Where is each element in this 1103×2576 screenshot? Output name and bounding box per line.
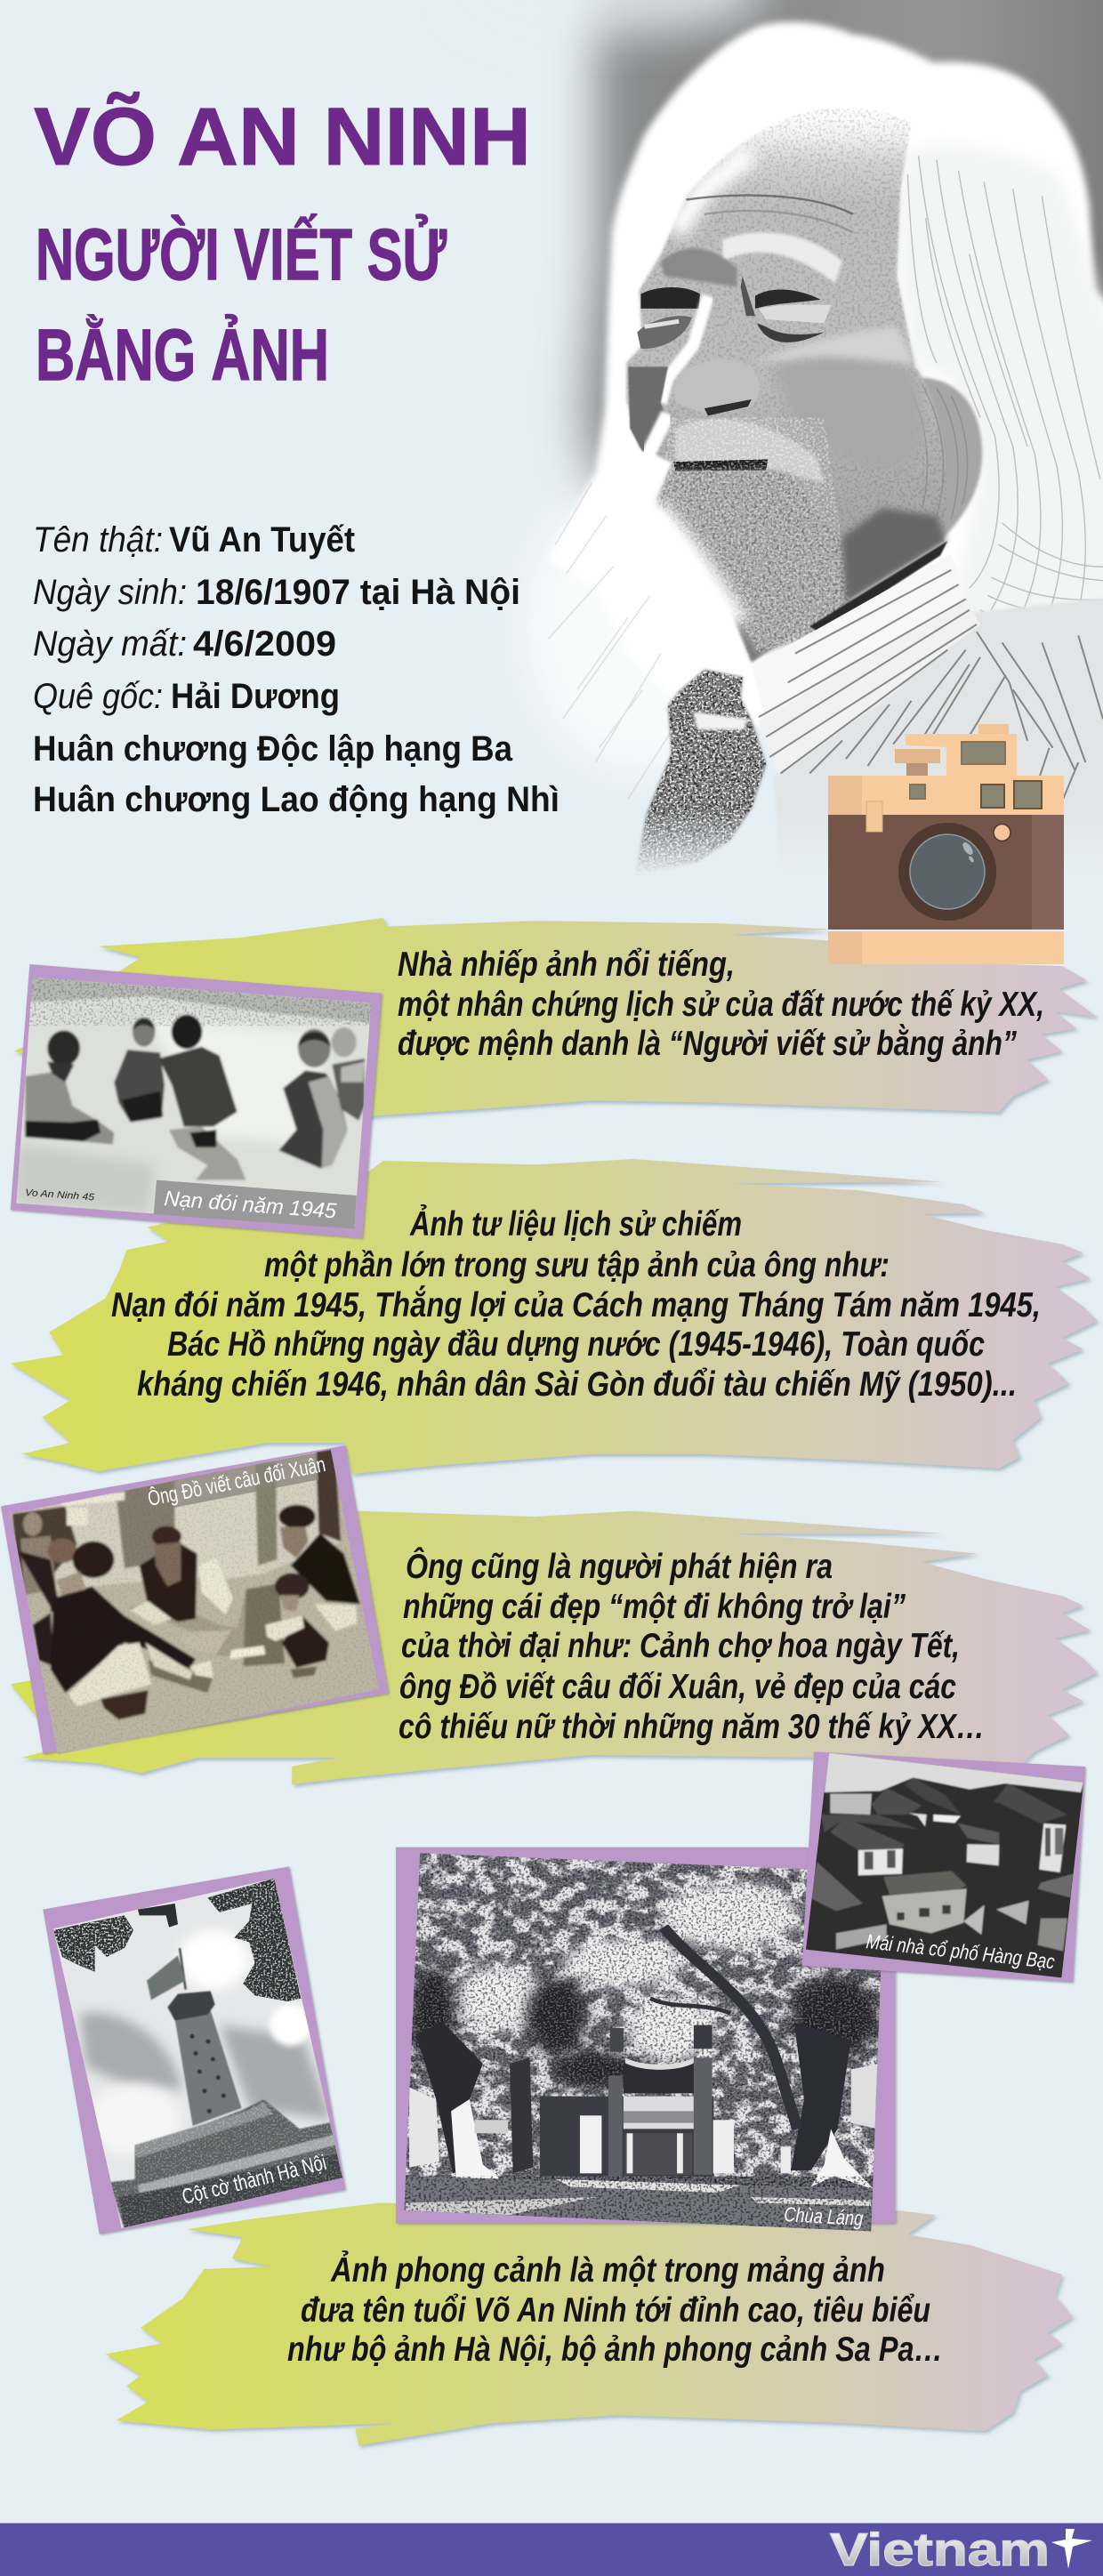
title [34, 91, 531, 396]
brush 3 text [399, 1546, 985, 1746]
brush 4 text [287, 2250, 943, 2369]
brush 3 text: của thời đại như: Cảnh chợ hoa ngày Tết, [401, 1627, 960, 1665]
biography facts: Hải Dương [171, 677, 340, 716]
biography facts: Ngày mất: [33, 624, 187, 664]
photo: Hanoi flag tower [43, 1866, 347, 2234]
camera icon [828, 724, 1064, 964]
biography facts: Tên thật: [33, 520, 163, 559]
photo: Ông Đồ [0, 1445, 389, 1759]
logo: Vietnam+ [830, 2524, 1092, 2576]
title: NGƯỜI VIẾT SỬ [36, 214, 447, 295]
caption: Mái nhà cổ phố Hàng Bạc: Mái nhà cổ phố Hàng Bạc [865, 1929, 1056, 1973]
brush 4 text: như bộ ảnh Hà Nội, bộ ảnh phong cảnh Sa Pa… [287, 2330, 943, 2369]
biography facts: Vũ An Tuyết [169, 520, 355, 559]
portrait of Võ An Ninh [461, 0, 1103, 886]
title: BẰNG ẢNH [36, 315, 329, 396]
brush stroke 2 [11, 1159, 1098, 1474]
biography facts [33, 520, 560, 819]
photographer signature: Vo An Ninh 45 [25, 1187, 95, 1203]
brush stroke 1 [14, 918, 1098, 1128]
brush 2 text [111, 1204, 1041, 1404]
brush 3 text: Ông cũng là người phát hiện ra [406, 1546, 833, 1586]
photo: famine 1945 [11, 964, 382, 1238]
title: VÕ AN NINH [34, 91, 531, 182]
biography facts: Huân chương Độc lập hạng Ba [33, 729, 513, 769]
biography facts: Ngày sinh: [33, 573, 187, 612]
brush 3 text: những cái đẹp “một đi không trở lại” [403, 1588, 906, 1626]
brush 1 text: Nhà nhiếp ảnh nổi tiếng, [398, 946, 735, 984]
caption: Cột cờ thành Hà Nội: Cột cờ thành Hà Nội [180, 2151, 329, 2210]
biography facts: 4/6/2009 [193, 624, 336, 664]
photo: Hàng Bạc roofs [801, 1750, 1091, 1984]
caption: Ông Đồ viết câu đối Xuân: Ông Đồ viết câu đối Xuân [146, 1452, 327, 1511]
brush 2 text: Ảnh tư liệu lịch sử chiếm [409, 1204, 742, 1244]
caption: Nạn đói năm 1945: Nạn đói năm 1945 [164, 1187, 338, 1224]
logo: Vietnam+: Vietnam [830, 2524, 1050, 2576]
brush stroke 3 [11, 1511, 1098, 1784]
brush 1 text [398, 946, 1044, 1063]
caption: Chùa Láng: Chùa Láng [784, 2202, 864, 2230]
photo: Chùa Láng [396, 1847, 895, 2235]
brush 2 text: một phần lớn trong sưu tập ảnh của ông như: [264, 1246, 890, 1284]
brush 3 text: cô thiếu nữ thời những năm 30 thế kỷ XX… [399, 1708, 985, 1746]
brush stroke 4 [106, 2202, 1073, 2445]
biography facts: Huân chương Lao động hạng Nhì [33, 780, 560, 819]
brush 3 text: ông Đồ viết câu đối Xuân, vẻ đẹp của các [399, 1668, 956, 1706]
brush 4 text: đưa tên tuổi Võ An Ninh tới đỉnh cao, tiêu biểu [301, 2291, 930, 2330]
biography facts: Quê gốc: [33, 677, 163, 716]
footer bar [0, 2523, 1103, 2576]
biography facts: 18/6/1907 tại Hà Nội [196, 573, 520, 612]
brush 4 text: Ảnh phong cảnh là một trong mảng ảnh [330, 2250, 885, 2290]
